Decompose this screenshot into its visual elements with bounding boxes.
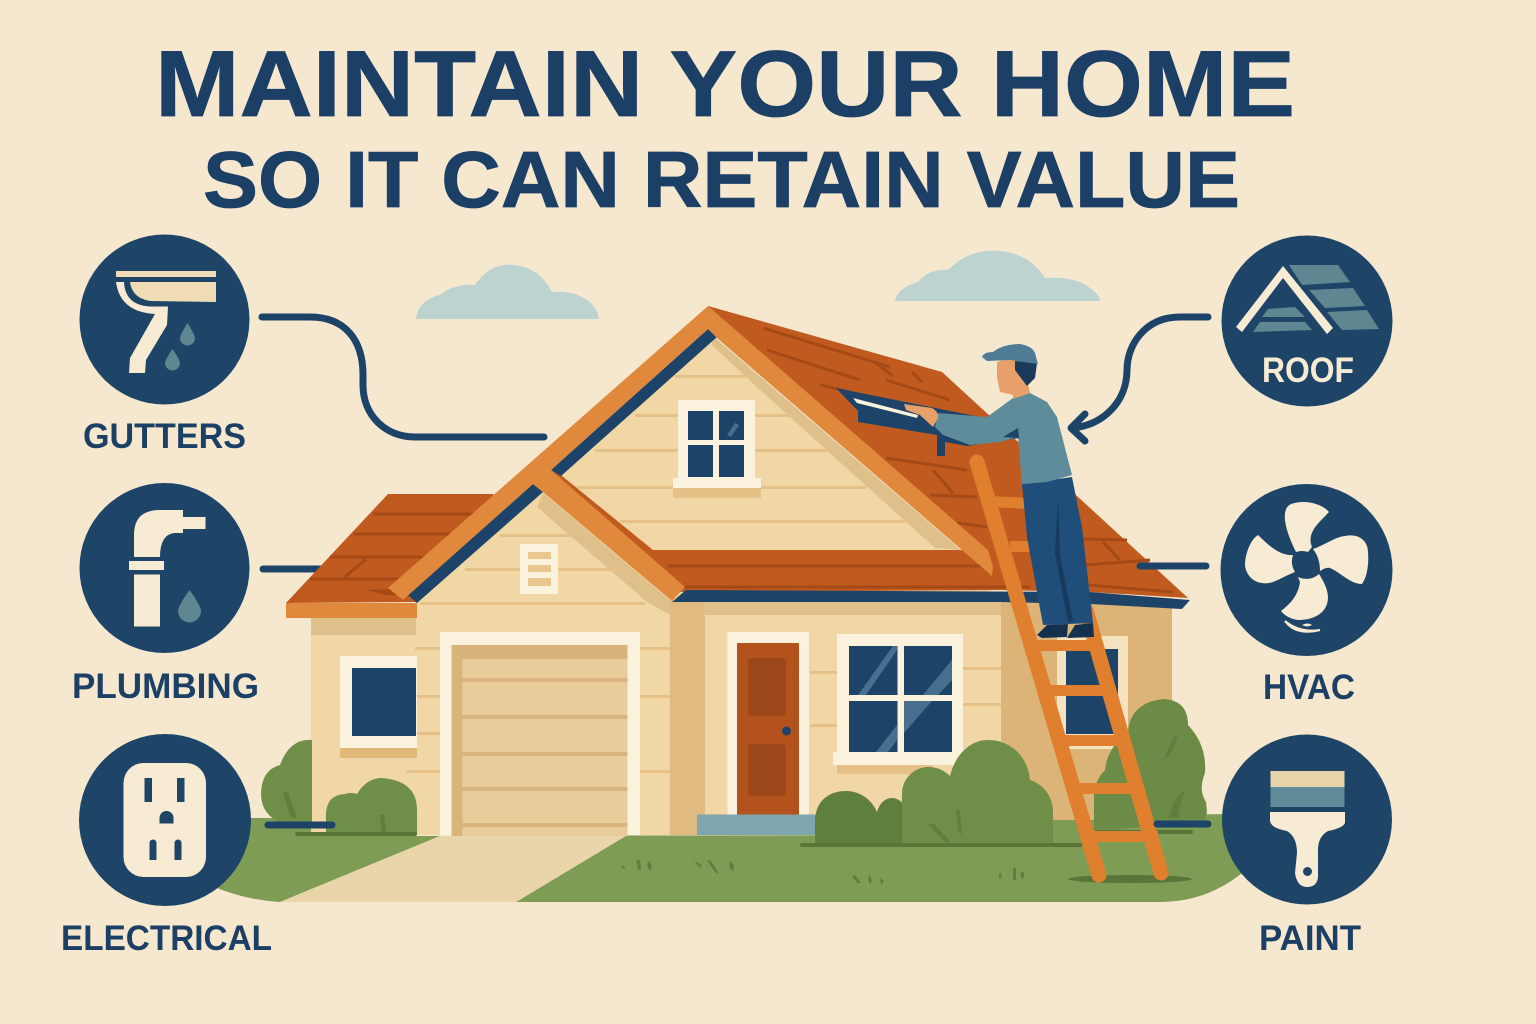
icon: hvac fan: [1220, 484, 1392, 656]
main roof: [548, 306, 1188, 598]
gable window: [673, 400, 761, 498]
pants: [1022, 477, 1093, 625]
garage door: [440, 632, 640, 836]
left roof: [286, 494, 494, 618]
icon: electrical outlet: [79, 734, 251, 906]
label: electrical: ELECTRICAL: [61, 919, 272, 958]
ladder: [977, 462, 1192, 883]
shoes: [1037, 623, 1094, 638]
cap: [982, 344, 1038, 364]
label: paint: PAINT: [1259, 919, 1361, 958]
title: SO IT CAN RETAIN VALUE: [203, 135, 1240, 224]
hand: [904, 404, 938, 427]
clouds: [416, 251, 1100, 319]
roof arrow: [1071, 317, 1208, 441]
gable rakes: [388, 306, 993, 603]
gutter piece: [836, 388, 1020, 456]
icon: plumbing: [80, 483, 250, 653]
pants shadow: [1055, 497, 1073, 622]
siding lines: [407, 375, 1001, 773]
connector lines behind house: [262, 317, 544, 569]
worker: [836, 344, 1094, 638]
icon: roof: ROOF: [1262, 351, 1354, 390]
left window: [340, 656, 417, 758]
attic vent: [520, 544, 558, 594]
icon: gutters: [80, 234, 250, 404]
bushes: [261, 699, 1207, 847]
title: MAINTAIN YOUR HOME: [155, 31, 1295, 136]
label: gutters: GUTTERS: [83, 417, 246, 456]
head: [997, 358, 1037, 399]
front door: [697, 632, 816, 835]
label: plumbing: PLUMBING: [72, 667, 259, 706]
front window: [833, 634, 965, 774]
house: [286, 306, 1190, 836]
arm shadow: [1003, 428, 1019, 438]
icon: paint brush: [1222, 734, 1392, 904]
right side window: [1057, 636, 1128, 749]
title: [155, 31, 1295, 224]
roof fascia: [672, 590, 1190, 609]
connector lines over house: [268, 566, 1208, 825]
shirt: [935, 393, 1072, 484]
house walls: [311, 332, 1172, 835]
icon: roof: [1222, 236, 1392, 406]
lawn and driveway: [212, 814, 1248, 902]
hair: [1015, 361, 1037, 386]
label: hvac: HVAC: [1263, 668, 1355, 707]
